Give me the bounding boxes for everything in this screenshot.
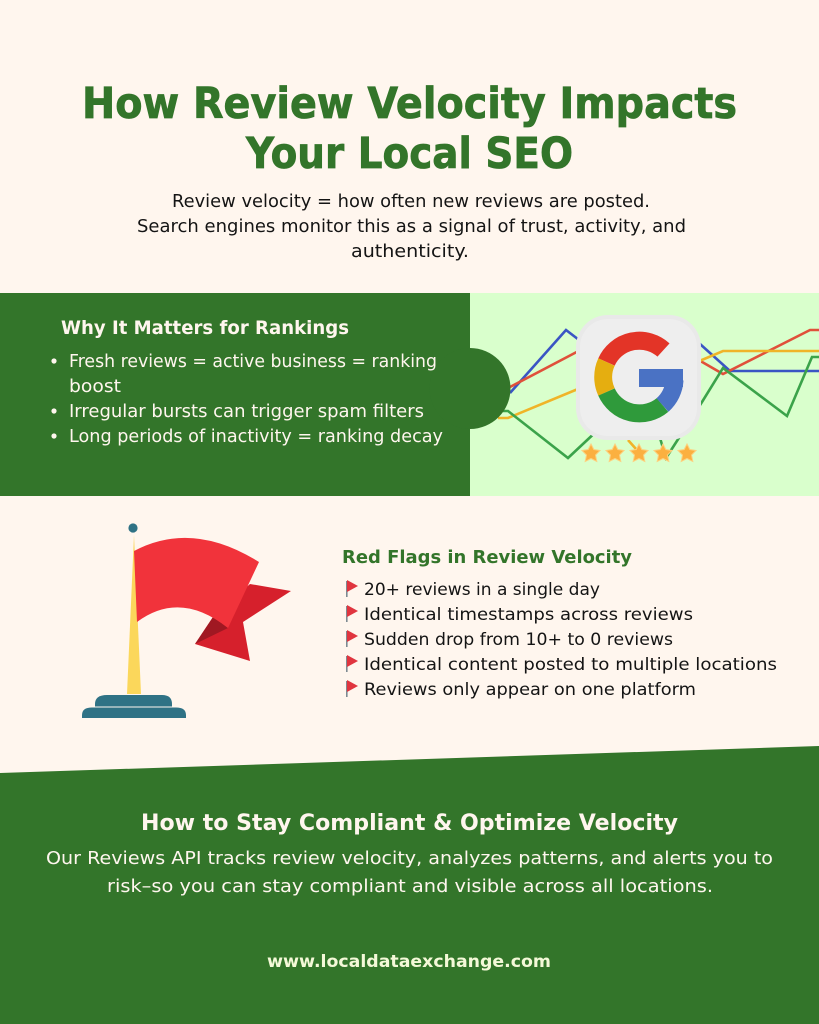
panel: why it matters: [0, 293, 470, 496]
intro text: Search engines monitor this as a signal of trust, activity, and: [137, 217, 686, 237]
icon: google tile: [576, 315, 701, 440]
heading: why it matters: Why It Matters for Rankings: [61, 317, 349, 339]
bullet list: ranking factors: Irregular bursts can trigger spam filters: [69, 402, 424, 422]
website url: www.localdataexchange.com: [267, 952, 551, 972]
title: Your Local SEO: [245, 129, 573, 179]
list item: one platform: Reviews only appear on one platform: [364, 680, 696, 700]
bullet list: ranking factors: boost: [69, 377, 121, 397]
body text: [46, 848, 773, 897]
list item: sudden drop: Sudden drop from 10+ to 0 reviews: [364, 630, 673, 650]
icon: google G: [603, 341, 683, 413]
title: [82, 79, 737, 179]
heading: red flags: Red Flags in Review Velocity: [342, 547, 632, 568]
panel: red flags list: [342, 547, 777, 700]
heading: stay compliant: How to Stay Compliant & Optimize Velocity: [141, 811, 678, 836]
semicircle tab: [430, 348, 510, 429]
bullet list: ranking factors: [51, 352, 443, 447]
line chart: [498, 330, 819, 458]
intro text: Review velocity = how often new reviews are posted.: [172, 192, 650, 212]
body text: risk–so you can stay compliant and visible across all locations.: [107, 876, 713, 897]
intro text: [137, 192, 686, 262]
body text: Our Reviews API tracks review velocity, analyzes patterns, and alerts you to: [46, 848, 773, 869]
title: How Review Velocity Impacts: [82, 79, 737, 129]
panel: google line chart illustration: [430, 293, 819, 496]
icon: five stars: [582, 444, 696, 462]
bullet list: ranking factors: Long periods of inactivity = ranking decay: [69, 427, 443, 447]
intro text: authenticity.: [351, 242, 469, 262]
bullet list: ranking factors: Fresh reviews = active business = ranking: [69, 352, 437, 372]
list item: identical content: Identical content posted to multiple locations: [364, 655, 777, 675]
list item: identical timestamps: Identical timestamps across reviews: [364, 605, 693, 625]
illustration: red flag on pole: [82, 523, 291, 718]
list item: 20+ reviews: 20+ reviews in a single day: [364, 580, 600, 600]
panel: stay compliant footer: [0, 746, 819, 1024]
